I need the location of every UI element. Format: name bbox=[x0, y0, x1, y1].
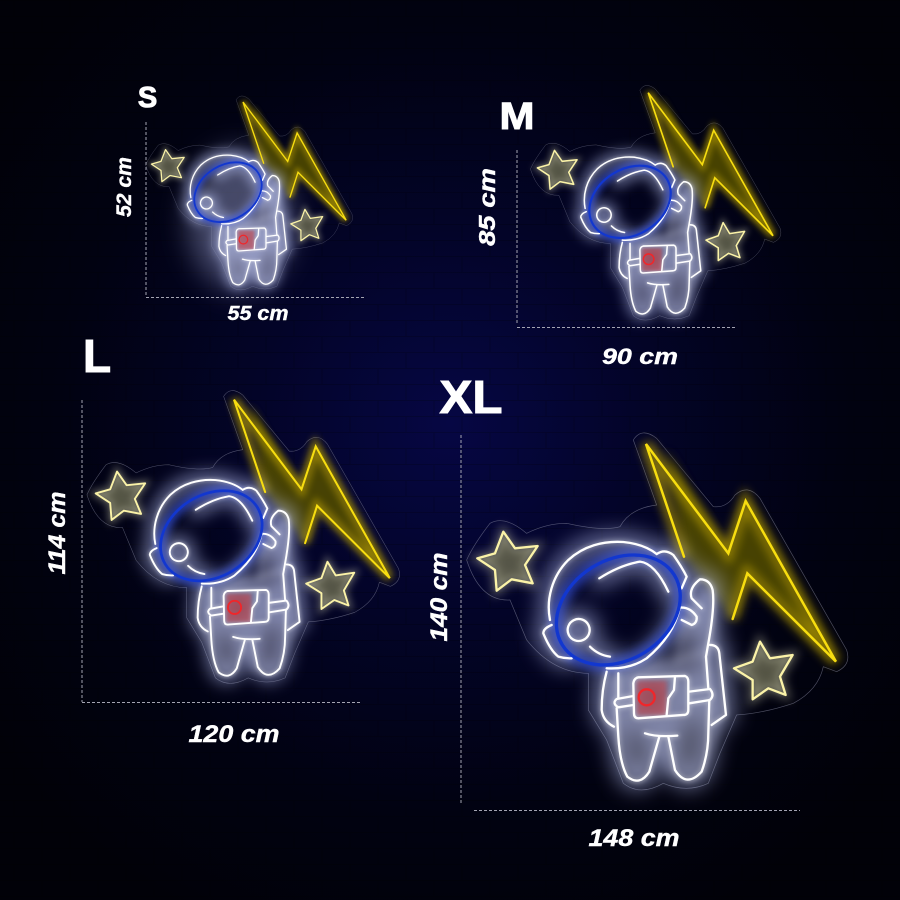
height label S: 52 cm bbox=[113, 157, 136, 217]
width label S: 55 cm bbox=[228, 303, 288, 325]
panel: size XL bbox=[426, 371, 848, 852]
panel: size L bbox=[44, 330, 400, 748]
width label L: 120 cm bbox=[188, 721, 280, 748]
size label XL: XL bbox=[440, 371, 502, 423]
dimension lines L bbox=[82, 400, 362, 702]
dimension lines S bbox=[146, 122, 365, 298]
height label L: 114 cm bbox=[44, 492, 71, 574]
neon sign L bbox=[87, 391, 400, 683]
width label M: 90 cm bbox=[602, 344, 678, 369]
panel: size M bbox=[474, 85, 781, 369]
size label M: M bbox=[500, 96, 534, 138]
width label XL: 148 cm bbox=[588, 825, 680, 852]
size label S: S bbox=[138, 82, 157, 114]
dimension lines XL bbox=[461, 435, 800, 810]
size label L: L bbox=[83, 330, 111, 382]
height label M: 85 cm bbox=[474, 168, 500, 246]
neon sign S bbox=[146, 96, 353, 290]
extra glow S bbox=[188, 150, 292, 290]
neon sign M bbox=[530, 85, 781, 320]
height label XL: 140 cm bbox=[426, 552, 453, 642]
neon sign XL bbox=[467, 433, 848, 790]
panel: size S bbox=[113, 82, 365, 325]
dimension lines M bbox=[517, 150, 735, 328]
